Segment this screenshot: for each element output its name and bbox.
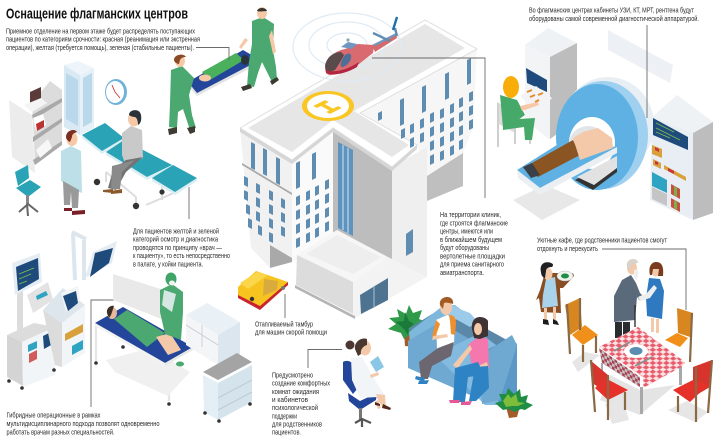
text block: waiting rooms: создание комфортных (272, 379, 330, 388)
right wing ground floor (427, 153, 463, 201)
scene: MRI room (497, 28, 713, 220)
glass atrium (333, 130, 392, 262)
sofa (408, 301, 517, 406)
title: Оснащение флагманских центров (6, 6, 188, 22)
surgeon (160, 272, 184, 366)
text block: hybrid operating rooms: Гибридные операционные в рамках (6, 410, 101, 420)
control cabinet (650, 95, 713, 220)
potted plant (388, 305, 424, 347)
leader line: MRI (646, 25, 648, 118)
text block: diagnostics (529, 6, 699, 23)
text block: helipads: для приема санитарного (440, 260, 504, 268)
text block: reception: операции), желтая (требуется помощь), зеленая (стабильные пациенты). (6, 43, 194, 52)
text block: waiting rooms (272, 370, 330, 437)
scene: psychologist in chair (343, 339, 391, 427)
operating table (94, 274, 193, 406)
text block: waiting rooms: Предусмотрено (272, 370, 313, 380)
chair: red left (590, 360, 629, 424)
shelving unit (9, 81, 62, 173)
roof (240, 20, 477, 171)
woman in blue dress (638, 262, 664, 333)
left tower wall (240, 128, 292, 268)
text block: cafe (537, 236, 668, 253)
leader line: waiting room (308, 350, 342, 368)
text block: doctor to patient (133, 226, 230, 268)
scene: cafe (536, 259, 712, 424)
elderly man (614, 259, 645, 338)
text block: doctor to patient: Для пациентов желтой и зеленой (133, 226, 219, 236)
leader line: ambulance (284, 294, 286, 318)
text block: doctor to patient: проводятся по принципу «врач — (133, 243, 223, 252)
wall panel (608, 30, 673, 83)
windows (244, 58, 473, 248)
control console (520, 28, 577, 140)
text block: doctor to patient: к пациенту», то есть непосредственно (133, 251, 230, 260)
waitress (536, 262, 574, 325)
text block: ambulance vestibule: для машин скорой помощи (255, 328, 327, 337)
text block: helipads: где строятся флагманские (440, 218, 508, 227)
text block: cafe: Уютные кафе, где родственники пациентов смогут (537, 236, 668, 244)
text block: helipads: авиатранспорта. (440, 268, 484, 277)
tower end wall (392, 147, 427, 277)
icon: helicopter (293, 13, 401, 81)
stretcher (188, 50, 268, 96)
text block: doctor to patient: в палате, у койки пациента. (133, 259, 203, 268)
leader line: operating room (91, 300, 155, 407)
medic right (239, 7, 279, 91)
chair: red right (668, 360, 712, 422)
chair: orange left (565, 298, 600, 372)
scene: hospital building (240, 20, 477, 319)
text block: waiting rooms: пациентов. (272, 428, 301, 437)
swivel chair (15, 165, 41, 216)
text block: helipads: вертолетные площадки (440, 251, 505, 260)
text block: helipads: На территории клиник, (440, 210, 501, 219)
glass cabinet (64, 61, 94, 135)
office chair (343, 361, 377, 427)
medic left (168, 55, 196, 135)
text block: ambulance vestibule: Отапливаемый тамбур (255, 320, 313, 328)
text block: reception (6, 26, 200, 52)
scene: sofa with visitors (388, 297, 517, 406)
scanner ring (556, 77, 654, 190)
text block: helipads: центры, имеются или (440, 226, 493, 236)
inner wall (292, 130, 340, 262)
text block: hybrid operating rooms: мультидисциплинарного подхода позволят одновременно (6, 419, 160, 428)
text block: waiting rooms: поддержки (272, 411, 297, 420)
text block: reception: Приемное отделение на первом этаже будет распределять поступающих (6, 26, 195, 36)
seated patient (103, 110, 143, 194)
visitor man (415, 297, 456, 384)
leader line: couch (188, 187, 190, 219)
exam couch (82, 123, 197, 209)
text block: cafe: отдохнуть и перекусить (537, 244, 598, 253)
text block: waiting rooms: для родственников (272, 420, 322, 428)
operator (497, 76, 539, 147)
scene: medics with stretcher (168, 7, 279, 135)
right wing wall (360, 47, 477, 176)
psychologist (346, 339, 391, 410)
chair: orange right (665, 308, 693, 362)
scanned patient (523, 128, 613, 178)
scene: hybrid operating room (7, 232, 252, 423)
visitor woman (449, 317, 489, 405)
text block: waiting rooms: психологической (272, 403, 318, 412)
text block: hybrid operating rooms (6, 410, 160, 436)
text block: waiting rooms: комнат ожидания (272, 387, 319, 396)
trolley (203, 353, 252, 423)
niche under tower (270, 245, 292, 268)
icon: ambulance (238, 271, 288, 310)
instrument cabinet (186, 303, 240, 365)
leader line: cafe (602, 249, 686, 310)
low block (295, 229, 427, 319)
plant: floor (495, 388, 533, 418)
scene: examination room (9, 61, 197, 216)
text block: doctor to patient: категорий осмотр и диагностика (133, 235, 218, 244)
text block: helipads: в ближайшем будущем (440, 235, 502, 244)
text block: helipads (440, 210, 508, 277)
dining table (599, 327, 685, 415)
doctor (61, 130, 85, 215)
text block: reception: пациентов по категориям срочности: красная (реанимация или экстренная (6, 34, 200, 44)
leader line: reception (196, 48, 229, 60)
icon: wall clock (105, 79, 127, 105)
text block: helipads: будут оборудованы (440, 243, 489, 252)
leader line: helipad (372, 58, 485, 198)
ceiling monitor arm (72, 232, 117, 280)
scanner table (513, 143, 617, 220)
equipment rack (7, 253, 85, 390)
text block: ambulance vestibule (255, 320, 327, 337)
text block: waiting rooms: и кабинетов (272, 395, 308, 404)
text block: hybrid operating rooms: работать врачам разных специальностей. (6, 427, 114, 436)
icon: helipad (302, 91, 354, 121)
